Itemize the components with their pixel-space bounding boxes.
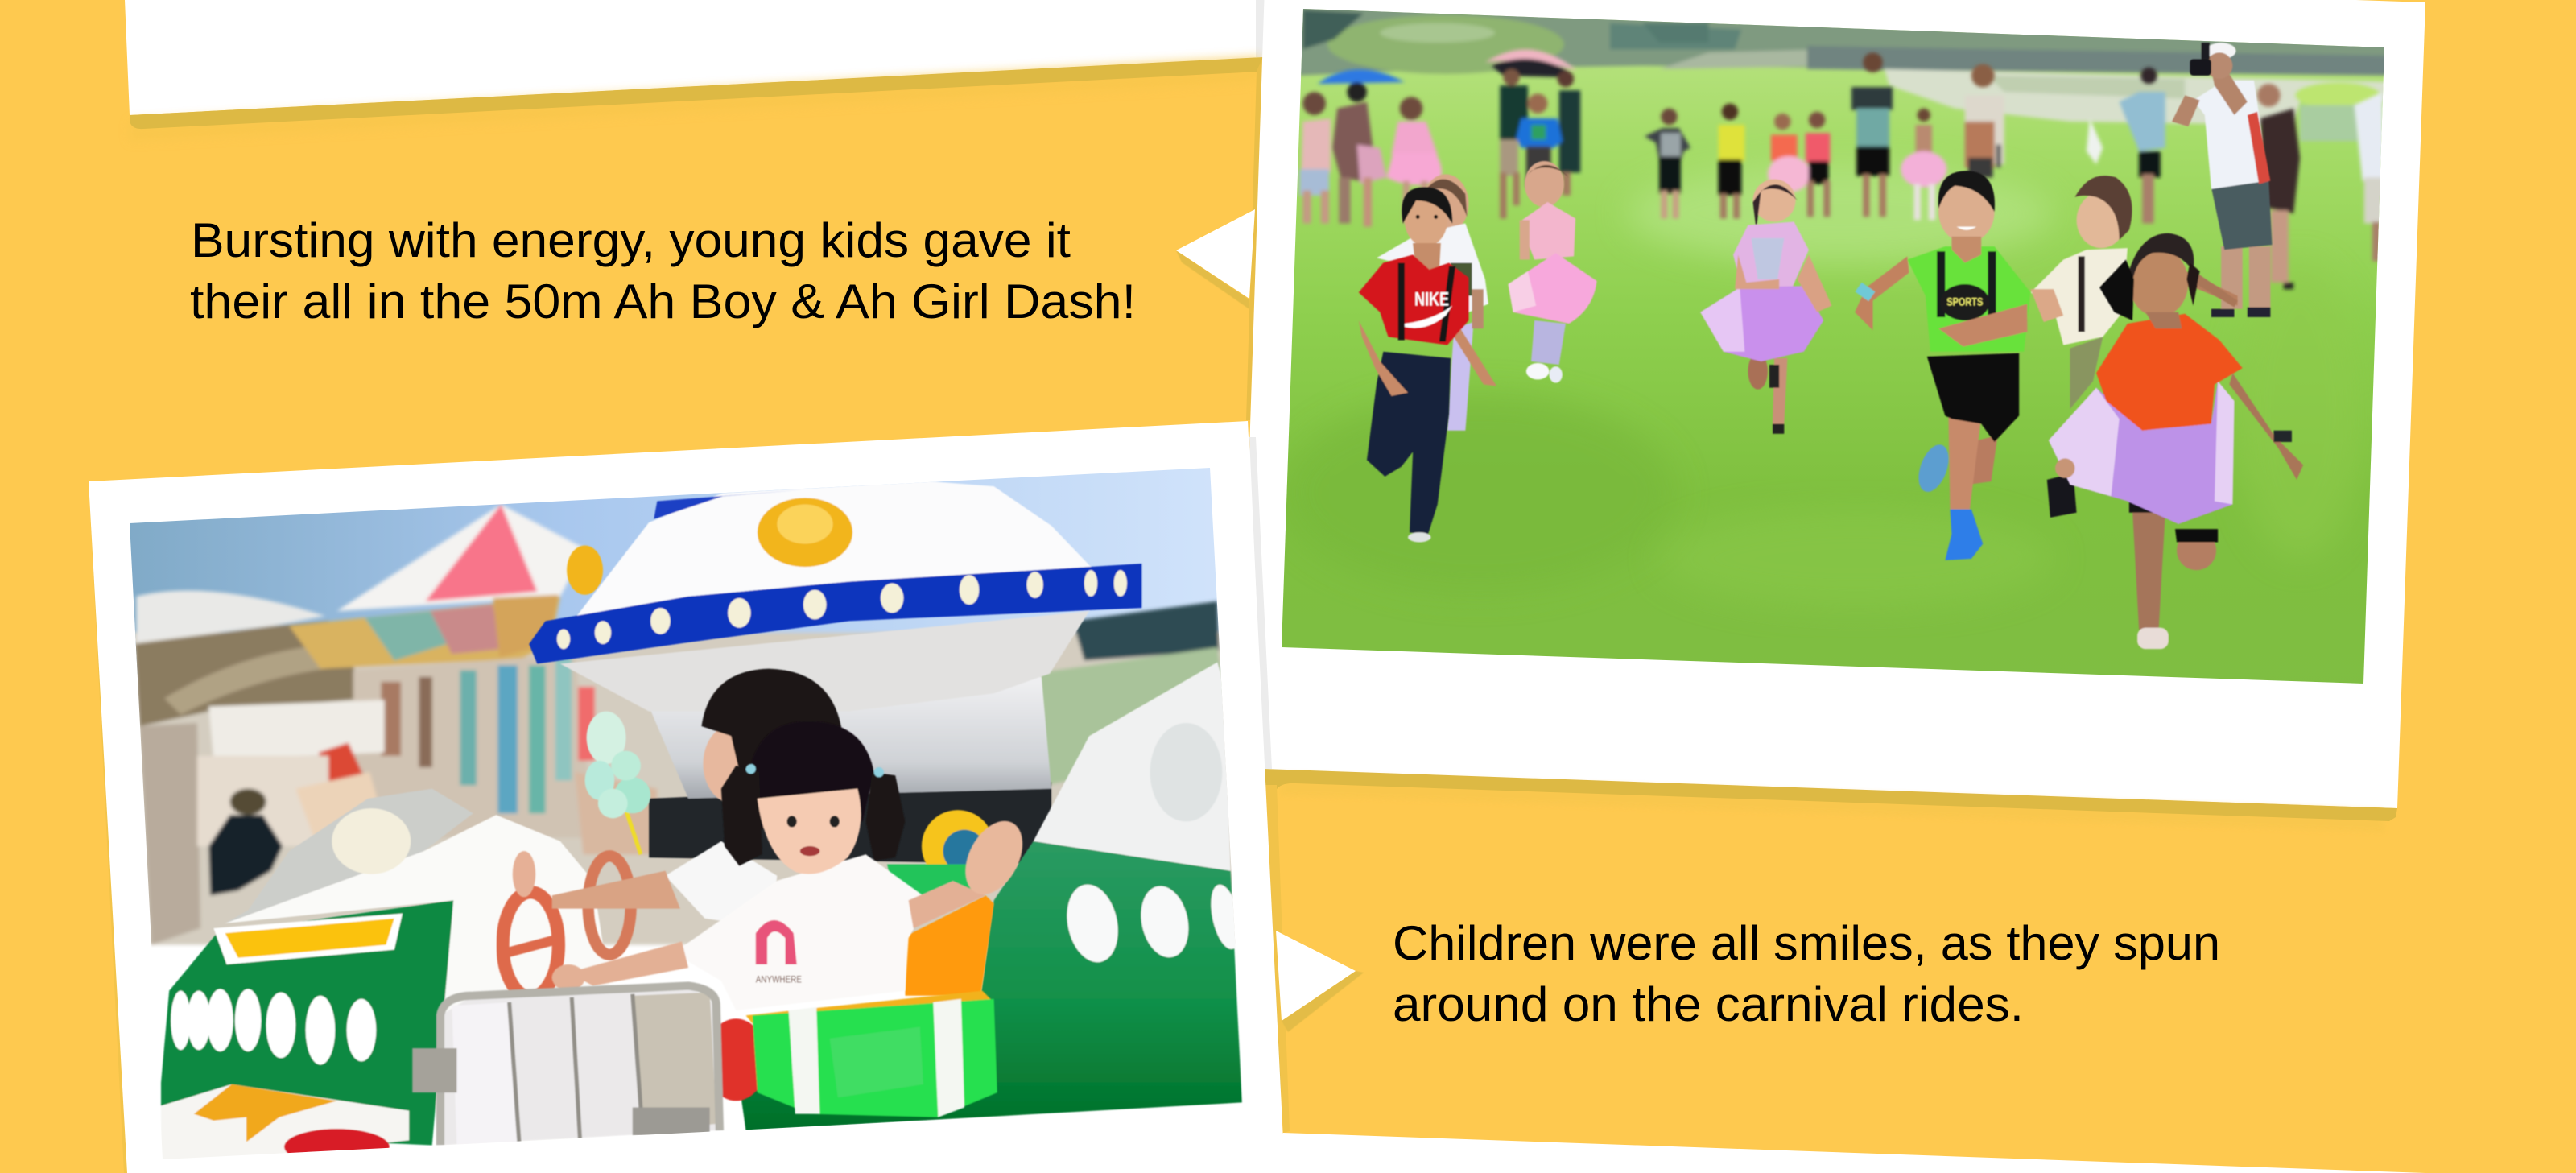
plane ride cockpit and nose <box>161 789 633 1167</box>
caption: carnival rides: Children were all smiles, as they spun <box>1393 916 2220 970</box>
boy in red shirt: NIKE <box>1414 289 1449 311</box>
balloon flower <box>585 712 650 854</box>
caption: 50m dash <box>190 213 1136 328</box>
boy in white printed shirt <box>2030 176 2238 518</box>
panel: top white card <box>125 0 1268 115</box>
arrow: pointer to running photo <box>1176 209 1255 309</box>
panel shadow: under top card <box>130 56 1263 420</box>
shadow: on upper polaroid from lower polaroid <box>1249 437 1272 769</box>
caption: 50m dash: their all in the 50m Ah Boy & Ah Girl Dash! <box>190 275 1136 328</box>
panel: polaroid of children running <box>1239 0 2425 808</box>
arrow: pointer to carnival photo <box>1276 931 1364 1032</box>
girl in white shirt <box>552 721 1034 1010</box>
boy in green shirt: SPORTS <box>1946 296 1983 309</box>
sky <box>115 460 1249 674</box>
photographer <box>2172 43 2272 317</box>
girl in white shirt: ANYWHERE <box>756 973 802 985</box>
carnival background <box>115 505 1265 944</box>
girl in pink tutu <box>1508 161 1597 383</box>
caption: 50m dash: Bursting with energy, young kids gave it <box>191 213 1071 267</box>
girl in orange shirt and purple tutu <box>2049 233 2303 649</box>
caption: carnival rides <box>1393 916 2220 1031</box>
panel: bottom white card <box>1256 1133 2425 1173</box>
caption: carnival rides: around on the carnival rides. <box>1393 977 2024 1031</box>
girl behind boy in white <box>1377 174 1488 431</box>
rocket and rail <box>412 985 997 1145</box>
boy in green shirt <box>1855 171 2030 560</box>
plane ride right fuselage <box>739 662 1245 1130</box>
photo: children on a plane ride <box>115 460 1265 1167</box>
boy in red shirt <box>1359 188 1496 542</box>
panel shadow: under running photo polaroid <box>1264 769 2397 1133</box>
photo: children running on the field <box>1265 0 2415 707</box>
panel: polaroid of children on carnival ride <box>89 421 1285 1173</box>
background spectators <box>1299 49 2385 289</box>
girl in lilac tutu <box>1700 179 1831 434</box>
grass <box>1265 0 2415 707</box>
UFO ride <box>529 481 1141 864</box>
older boy behind <box>513 669 841 928</box>
hills and water <box>1282 0 2399 142</box>
steering wheels <box>502 856 631 997</box>
seat and wheel <box>887 810 994 996</box>
